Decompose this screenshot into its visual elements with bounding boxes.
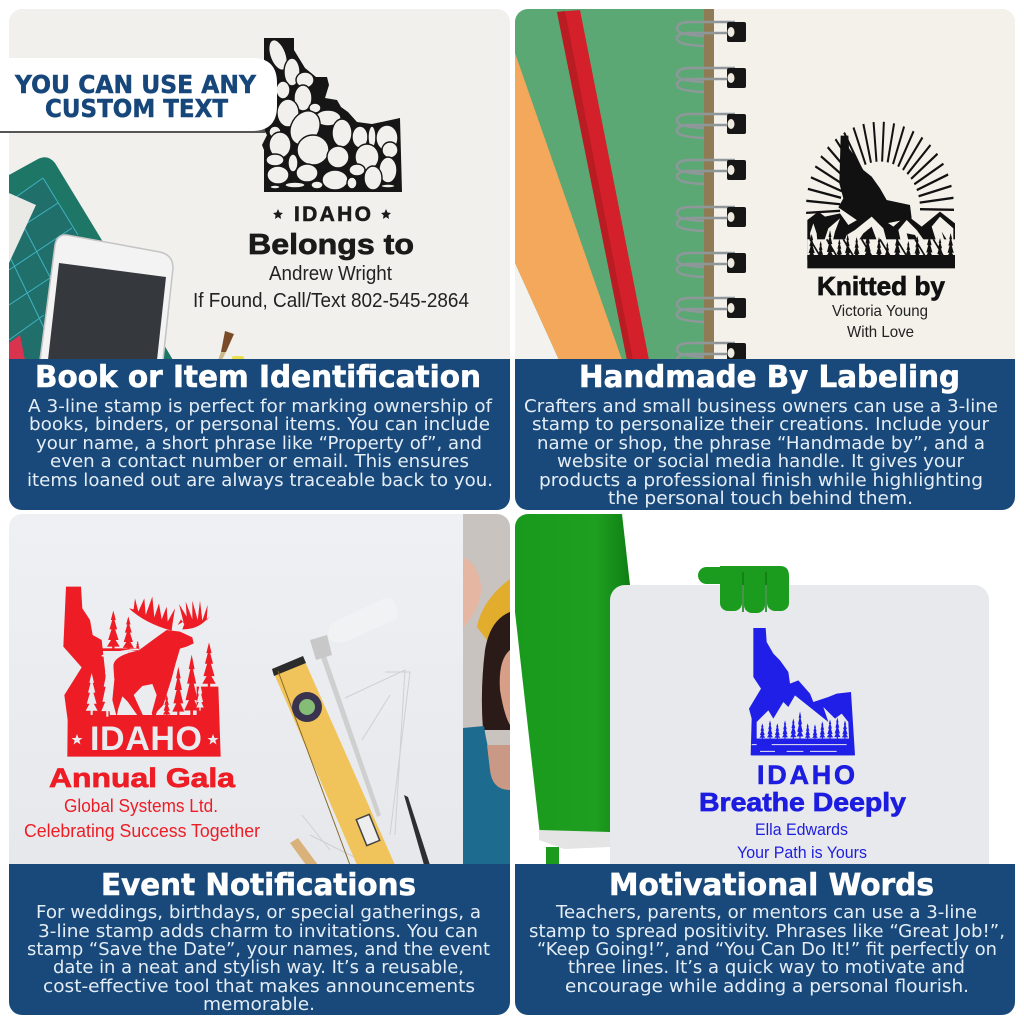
body text [27, 902, 490, 1015]
stamp text: Your Path is Yours: Your Path is Yours [737, 843, 867, 862]
photo: drafting tools and woman in hard hat [9, 514, 510, 865]
stamp: blue Idaho mountains with text [699, 628, 907, 862]
icon: green hand [698, 566, 789, 613]
body text: 3-line stamp adds charm to invitations. You can [38, 921, 478, 942]
stamp text: IDAHO inside map: IDAHO [90, 720, 202, 758]
stamp: red moose Idaho with text [24, 587, 260, 841]
stamp: stone-filled Idaho outline with text [193, 37, 469, 312]
heading: Motivational Words [609, 868, 934, 903]
icon: Idaho moose silhouette [63, 587, 221, 757]
body text: Teachers, parents, or mentors can use a 3-line [555, 902, 977, 923]
body text: products a professional finish while highlighting [539, 470, 983, 491]
stamp text: Knitted by: Knitted by [817, 271, 946, 301]
stamp text: With Love: With Love [847, 324, 914, 341]
callout: custom text banner [0, 58, 277, 133]
body text: A 3-line stamp is perfect for marking ownership of [28, 396, 493, 417]
callout: custom text banner: YOU CAN USE ANY [14, 70, 257, 99]
stamp text: star IDAHO star: IDAHO [294, 203, 371, 226]
panel: event notifications [9, 514, 510, 1015]
stamp text: Belongs to: Belongs to [248, 229, 414, 261]
icon: left star [273, 209, 283, 219]
body text: date in a neat and stylish way. It’s a reusable, [53, 957, 464, 978]
caption block [9, 864, 510, 1015]
body text: “Keep Going!”, and “You Can Do It!” fit perfectly on [537, 939, 997, 960]
icon: left star [72, 734, 82, 744]
stamp text: Annual Gala: Annual Gala [49, 763, 236, 793]
body text: stamp to personalize their creations. Include your [532, 414, 990, 435]
panel: motivational words [515, 514, 1015, 1015]
body text: stamp to spread positivity. Phrases like “Great Job!”, [529, 921, 1005, 942]
body text [27, 396, 493, 491]
panel: handmade by labeling [515, 9, 1015, 510]
stamp text: phone line: If Found, Call/Text 802-545-2864 [193, 290, 469, 312]
body text: Crafters and small business owners can use a 3-line [524, 396, 998, 417]
photo: spiral notebook with pencil and paper [515, 9, 1015, 367]
stamp text: Breathe Deeply: Breathe Deeply [699, 787, 907, 817]
body text: your name, a short phrase like “Property of”, and [36, 433, 482, 454]
icon: sun rays, Idaho, mountains and forest [806, 122, 955, 268]
callout: custom text banner: CUSTOM TEXT [45, 94, 228, 123]
heading: Handmade By Labeling [579, 360, 960, 395]
body text: website or social media handle. It gives your [557, 451, 965, 472]
illustration: green figure holding sign [515, 514, 989, 864]
body text: items loaned out are always traceable back to you. [27, 470, 493, 491]
body text: name or shop, the phrase “Handmade by”, and a [537, 433, 985, 454]
body text [524, 396, 998, 509]
body text: encourage while adding a personal flourish. [565, 976, 969, 997]
stamp text: company: Global Systems Ltd. [64, 796, 218, 816]
body text: even a contact number or email. This ensures [50, 451, 469, 472]
icon: Idaho with mountains [749, 628, 855, 755]
body text: memorable. [203, 994, 315, 1015]
photo: desk background [9, 9, 510, 361]
heading: Book or Item Identification [35, 360, 481, 395]
stamp text: tagline: Celebrating Success Together [24, 821, 260, 841]
icon: right star [208, 734, 218, 744]
body text: stamp “Save the Date”, your names, and the event [27, 939, 490, 960]
stamp text: name: Victoria Young [832, 303, 928, 320]
body text: three lines. It’s a quick way to motivate and [568, 957, 965, 978]
caption block [515, 359, 1015, 510]
icon: right star [381, 209, 391, 219]
stamp text: name: Andrew Wright [269, 263, 392, 285]
body text: books, binders, or personal items. You can include [29, 414, 490, 435]
icon: Idaho map of stones [262, 37, 402, 192]
body text: cost-effective tool that makes announcements [43, 976, 475, 997]
body text: the personal touch behind them. [608, 488, 913, 509]
body text: For weddings, birthdays, or special gatherings, a [36, 902, 481, 923]
stamp text: name: Ella Edwards [755, 820, 848, 839]
caption block [9, 359, 510, 510]
panel: book or item identification [9, 9, 510, 510]
caption block [515, 864, 1015, 1015]
heading: Event Notifications [101, 868, 416, 903]
body text [529, 902, 1005, 997]
stamp text: IDAHO: IDAHO [757, 760, 855, 790]
stamp: sunburst Idaho and mountains with text [806, 122, 955, 341]
